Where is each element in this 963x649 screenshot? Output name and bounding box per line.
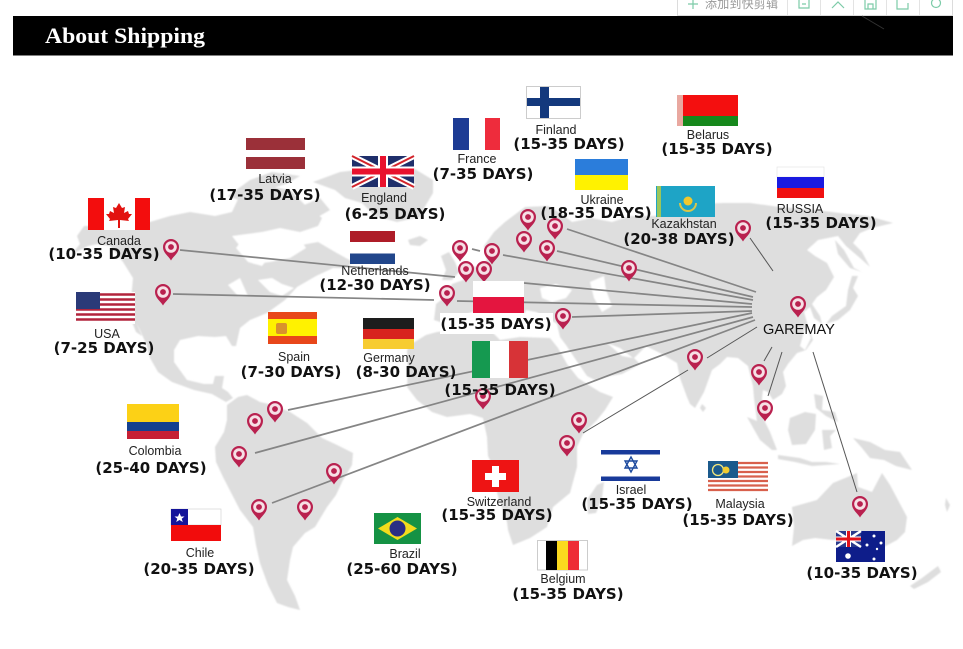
brazil: (25-60 DAYS) [346, 560, 458, 578]
latvia [209, 138, 321, 204]
brazil: Brazil [389, 547, 421, 561]
ukraine [540, 159, 652, 222]
hub label: GAREMAY [763, 322, 835, 338]
belgium [512, 540, 624, 603]
greenland [313, 160, 433, 222]
belgium: Belgium [540, 572, 586, 586]
england: (6-25 DAYS) [345, 205, 445, 223]
location pins [155, 209, 868, 520]
france: (7-35 DAYS) [433, 165, 533, 183]
spain [241, 312, 341, 381]
sulawesi [822, 430, 836, 450]
australia: (10-35 DAYS) [806, 564, 918, 582]
israel [581, 450, 693, 513]
netherlands: (12-30 DAYS) [319, 276, 431, 294]
heading: About Shipping [45, 23, 206, 48]
england [345, 156, 445, 223]
spain: Spain [278, 350, 310, 364]
sri lanka [700, 404, 706, 412]
kazakhstan [623, 186, 735, 248]
arctic islands [228, 172, 300, 202]
ukraine: (18-35 DAYS) [540, 204, 652, 222]
latvia: (17-35 DAYS) [209, 186, 321, 204]
sumatra java islands [778, 455, 840, 466]
malaysia: (15-35 DAYS) [682, 511, 794, 529]
italy: (15-35 DAYS) [444, 381, 556, 399]
usa: USA [94, 327, 121, 341]
latvia: Latvia [258, 172, 292, 186]
australia [792, 473, 907, 548]
switzerland: Switzerland [467, 495, 531, 509]
switzerland: (15-35 DAYS) [441, 506, 553, 524]
brazil [346, 513, 458, 578]
route lines [173, 229, 857, 503]
germany: (8-30 DAYS) [356, 363, 456, 381]
germany [356, 318, 456, 381]
australia [806, 531, 918, 582]
borneo [788, 412, 816, 445]
eurasia [434, 203, 893, 450]
canada: (10-35 DAYS) [48, 245, 160, 263]
africa [407, 328, 613, 545]
chile [143, 509, 255, 578]
switzerland [441, 460, 553, 524]
spain: (7-30 DAYS) [241, 363, 341, 381]
russia [765, 167, 877, 232]
italy [444, 341, 556, 399]
inland white areas [228, 232, 811, 358]
colombia: (25-40 DAYS) [95, 459, 207, 477]
malaysia [682, 461, 794, 529]
colombia [95, 404, 207, 477]
colombia: Colombia [129, 444, 181, 458]
south america [215, 395, 353, 610]
israel: Israel [616, 483, 646, 497]
belgium: (15-35 DAYS) [512, 585, 624, 603]
toolbar [678, 0, 952, 16]
france: France [458, 152, 496, 166]
ukraine: Ukraine [580, 193, 624, 207]
finland [513, 86, 625, 153]
belarus: (15-35 DAYS) [661, 140, 773, 158]
japan [826, 276, 858, 324]
kazakhstan: Kazakhstan [651, 217, 717, 231]
world map [72, 160, 950, 610]
iceland [408, 236, 428, 246]
belarus: Belarus [687, 128, 729, 142]
poland: (15-35 DAYS) [440, 315, 552, 333]
britain [441, 252, 459, 280]
header bar [13, 16, 953, 56]
kazakhstan: (20-38 DAYS) [623, 230, 735, 248]
russia: RUSSIA [777, 202, 824, 216]
finland: Finland [536, 123, 577, 137]
chile: (20-35 DAYS) [143, 560, 255, 578]
england: England [361, 191, 407, 205]
north and central america [72, 185, 353, 402]
france [433, 118, 533, 183]
netherlands [319, 231, 431, 294]
malaysia: Malaysia [715, 497, 765, 511]
germany: Germany [363, 351, 415, 365]
poland [440, 281, 553, 334]
madagascar [587, 482, 604, 514]
chile: Chile [186, 546, 214, 560]
israel: (15-35 DAYS) [581, 495, 693, 513]
usa: (7-25 DAYS) [54, 339, 154, 357]
new zealand [910, 566, 941, 589]
netherlands: Netherlands [341, 264, 409, 278]
philippines [814, 394, 838, 422]
new guinea [853, 438, 912, 470]
canada [48, 198, 160, 263]
canada: Canada [97, 234, 141, 248]
russia: (15-35 DAYS) [765, 214, 877, 232]
belarus [661, 95, 773, 158]
usa [54, 292, 154, 357]
finland: (15-35 DAYS) [513, 135, 625, 153]
